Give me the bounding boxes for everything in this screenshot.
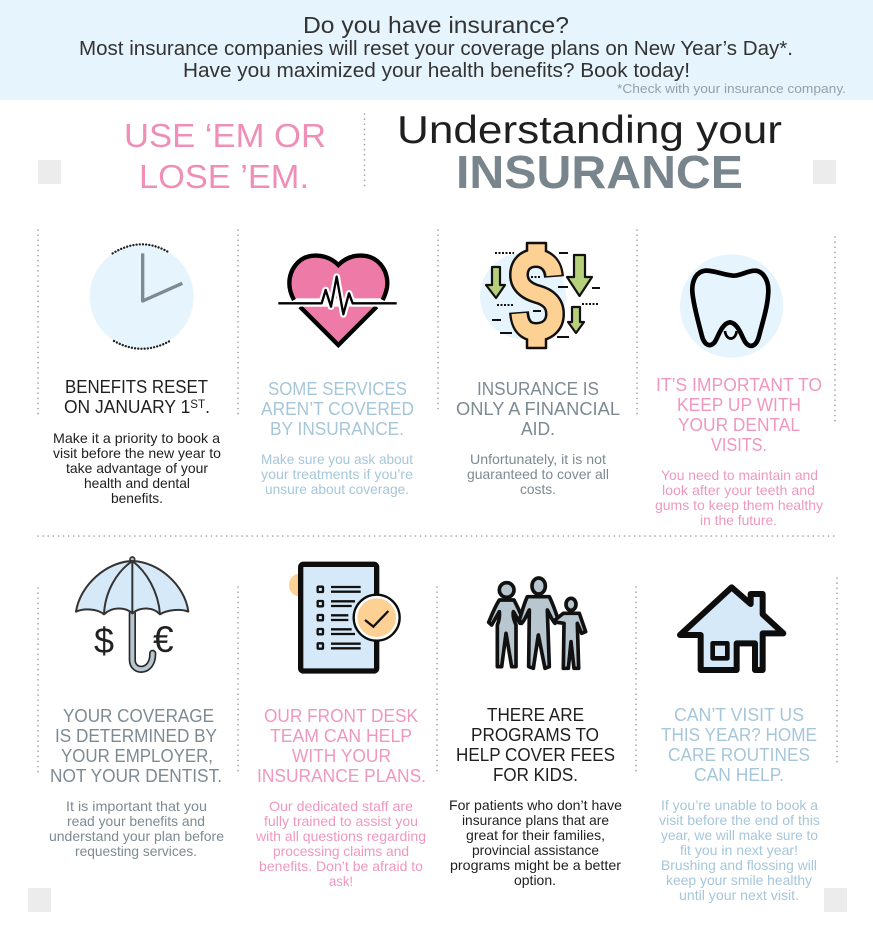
heading: .	[205, 397, 210, 417]
currency symbols: €	[153, 619, 174, 660]
heading: NOT YOUR DENTIST.	[50, 766, 222, 786]
slogan: LOSE ’EM.	[139, 158, 309, 195]
icon: family	[489, 578, 586, 668]
heading: CARE ROUTINES	[668, 745, 810, 765]
body text: health and dental	[84, 475, 190, 491]
panel: benefits reset	[53, 244, 221, 506]
body text: guaranteed to cover all	[467, 466, 609, 482]
icon: clock	[90, 244, 194, 349]
heading: YOUR COVERAGE	[63, 706, 214, 726]
heading: ST	[190, 397, 206, 411]
heading: SOME SERVICES	[268, 379, 407, 399]
body text: Our dedicated staff are	[269, 798, 413, 814]
body text: Unfortunately, it is not	[470, 451, 606, 467]
body text: insurance plans that are	[462, 812, 609, 828]
body text	[467, 451, 609, 497]
title: Understanding your	[397, 109, 782, 152]
icon: checklist	[289, 564, 400, 671]
panel: home care	[659, 587, 820, 903]
heading	[50, 706, 222, 786]
body text: programs might be a better	[450, 857, 621, 873]
icon: tooth	[680, 254, 783, 358]
title: INSURANCE	[456, 146, 743, 198]
body text: look after your teeth and	[662, 482, 815, 498]
icon: umbrella with currency	[76, 557, 188, 669]
body text	[53, 430, 221, 506]
body text: Make it a priority to book a	[53, 430, 220, 446]
panel: dental visits	[655, 254, 823, 528]
body text: ask!	[329, 873, 353, 889]
body text: gums to keep them healthy	[655, 497, 823, 513]
body text: provincial assistance	[472, 842, 599, 858]
heading: IS DETERMINED BY	[55, 726, 217, 746]
panel: header banner	[0, 0, 873, 100]
body text: processing claims and	[273, 843, 409, 859]
heading: CAN’T VISIT US	[674, 705, 804, 725]
panel: financial aid	[456, 243, 620, 497]
body text	[49, 798, 224, 859]
body text: keep your smile healthy	[666, 872, 812, 888]
heading	[64, 377, 210, 417]
heading: VISITS.	[711, 435, 767, 455]
body text: great for their families,	[466, 827, 605, 843]
heading: THIS YEAR? HOME	[661, 725, 817, 745]
heading: IT’S IMPORTANT TO	[656, 375, 822, 395]
body text: read your benefits and	[67, 813, 205, 829]
body text: Make sure you ask about	[261, 451, 413, 467]
panel: front desk	[255, 564, 426, 889]
body text: If you’re unable to book a	[661, 797, 818, 813]
body text	[255, 798, 426, 889]
icon: dollar sign with arrows	[480, 243, 600, 348]
body text: visit before the end of this	[659, 812, 820, 828]
body text: visit before the new year to	[53, 445, 221, 461]
body text: costs.	[520, 481, 556, 497]
body text: understand your plan before	[49, 828, 224, 844]
heading: YOUR DENTAL	[678, 415, 800, 435]
heading: YOUR EMPLOYER,	[61, 746, 213, 766]
body text	[449, 797, 622, 888]
heading: BENEFITS RESET	[65, 377, 208, 397]
heading: ON JANUARY 1	[64, 397, 194, 417]
heading: HELP COVER FEES	[456, 745, 615, 765]
panel: coverage by employer	[49, 557, 224, 859]
panel: programs for kids	[449, 578, 622, 888]
heading: AID.	[521, 419, 555, 439]
body text: fully trained to assist you	[264, 813, 418, 829]
body text	[261, 451, 413, 497]
body text: For patients who don’t have	[449, 797, 622, 813]
body text: your treatments if you’re	[261, 466, 413, 482]
currency symbols: $	[94, 620, 114, 661]
heading	[456, 379, 620, 439]
body text	[659, 797, 820, 903]
heading: WITH YOUR	[292, 746, 391, 766]
body text: benefits. Don’t be afraid to	[259, 858, 423, 874]
header line two: Most insurance companies will reset your coverage plans on New Year’s Day*.	[79, 38, 793, 60]
body text: option.	[514, 872, 556, 888]
footnote: *Check with your insurance company.	[617, 81, 846, 96]
icon: house	[680, 587, 783, 670]
body text: in the future.	[700, 512, 777, 528]
body text: fit you in next year!	[680, 842, 798, 858]
heading	[257, 706, 426, 786]
heading: TEAM CAN HELP	[270, 726, 412, 746]
heading: FOR KIDS.	[493, 765, 578, 785]
body text: benefits.	[111, 490, 163, 506]
slogan	[124, 117, 326, 195]
heading	[656, 375, 822, 455]
heading: CAN HELP.	[694, 765, 784, 785]
body text	[655, 467, 823, 528]
slogan: USE ‘EM OR	[124, 117, 326, 154]
heading: AREN’T COVERED	[261, 399, 414, 419]
heading: OUR FRONT DESK	[264, 706, 418, 726]
body text: Brushing and flossing will	[661, 857, 817, 873]
heading: KEEP UP WITH	[677, 395, 801, 415]
header question: Do you have insurance?	[303, 12, 569, 38]
heading: INSURANCE IS	[477, 379, 599, 399]
header line three: Have you maximized your health benefits? Book today!	[183, 60, 690, 82]
heading	[456, 705, 615, 785]
heading: ONLY A FINANCIAL	[456, 399, 620, 419]
body text: You need to maintain and	[661, 467, 818, 483]
heading: THERE ARE	[487, 705, 584, 725]
body text: year, we will make sure to	[661, 827, 818, 843]
currency symbols	[94, 619, 174, 661]
heading	[261, 379, 414, 439]
title	[397, 109, 782, 198]
body text: with all questions regarding	[255, 828, 426, 844]
heading: PROGRAMS TO	[471, 725, 599, 745]
heading: BY INSURANCE.	[270, 419, 404, 439]
icon: heart with pulse	[278, 256, 397, 346]
heading: INSURANCE PLANS.	[257, 766, 426, 786]
panel: services not covered	[261, 256, 414, 497]
heading	[661, 705, 817, 785]
body text: until your next visit.	[679, 887, 799, 903]
body text: take advantage of your	[66, 460, 208, 476]
body text: requesting services.	[75, 843, 197, 859]
body text: unsure about coverage.	[265, 481, 409, 497]
body text: It is important that you	[66, 798, 207, 814]
